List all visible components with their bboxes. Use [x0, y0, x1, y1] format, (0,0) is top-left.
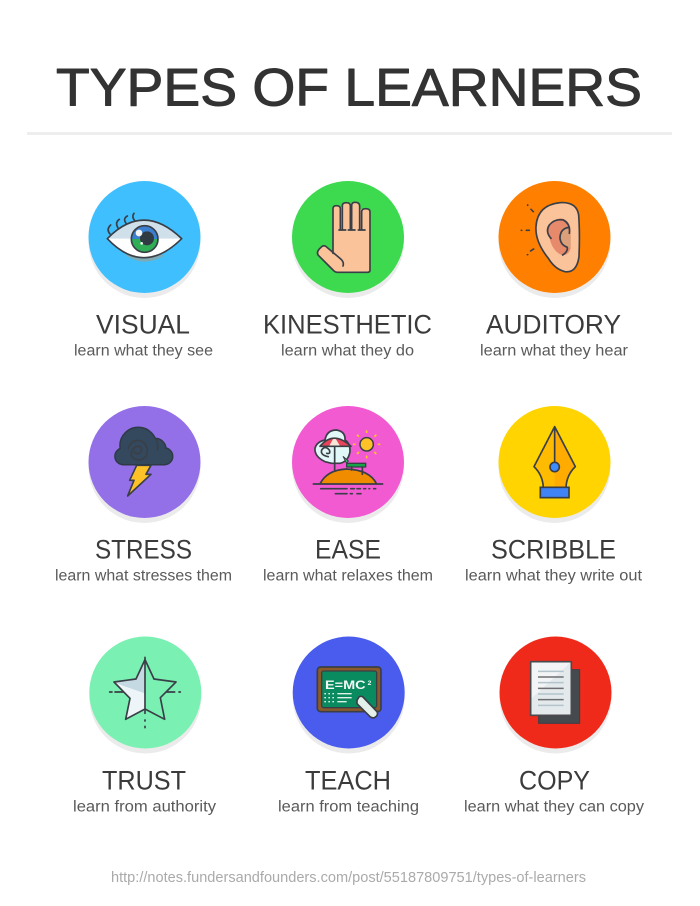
heading: auditory: AUDITORY	[486, 310, 621, 340]
heading: kinesthetic: KINESTHETIC	[263, 310, 432, 340]
icon: chalkboard: 2	[368, 680, 372, 687]
icon: pen nib	[534, 427, 575, 498]
panel: trust	[73, 636, 216, 816]
icon: ear	[521, 203, 579, 272]
panel: kinesthetic	[263, 181, 432, 360]
icon: chalkboard	[317, 667, 381, 718]
panel: visual	[74, 181, 213, 360]
icon: hand	[317, 202, 370, 272]
icon: eye	[107, 213, 182, 262]
icon: star	[110, 657, 180, 728]
heading: copy: COPY	[519, 766, 590, 796]
text: kinesthetic description: learn what they do	[281, 342, 414, 360]
panel: scribble	[465, 406, 643, 584]
icon: beach	[313, 430, 383, 494]
text: trust description: learn from authority	[73, 798, 216, 816]
heading: visual: VISUAL	[96, 310, 190, 340]
icon: chalkboard: E=MC	[325, 678, 366, 692]
text: copy description: learn what they can copy	[464, 798, 644, 816]
text: stress description: learn what stresses them	[55, 568, 232, 584]
heading: teach: TEACH	[305, 766, 391, 796]
panel: ease	[263, 406, 433, 584]
heading: stress: STRESS	[95, 534, 192, 564]
text: teach description: learn from teaching	[278, 798, 419, 816]
text: ease description: learn what relaxes them	[263, 568, 433, 584]
text: visual description: learn what they see	[74, 342, 213, 360]
heading: trust: TRUST	[102, 766, 186, 796]
panel: copy	[464, 636, 644, 816]
panel: stress	[55, 406, 232, 584]
text: scribble description: learn what they write out	[465, 568, 643, 584]
panel: auditory	[480, 181, 628, 360]
icon: storm cloud	[115, 427, 173, 496]
title: TYPES OF LEARNERS	[56, 58, 642, 118]
heading: ease: EASE	[315, 534, 381, 564]
panel: teach	[278, 636, 419, 816]
heading: scribble: SCRIBBLE	[491, 534, 616, 564]
icon: documents	[531, 662, 580, 723]
text: auditory description: learn what they hear	[480, 342, 628, 360]
source url: http://notes.fundersandfounders.com/post/55187809751/types-of-learners	[111, 869, 586, 886]
